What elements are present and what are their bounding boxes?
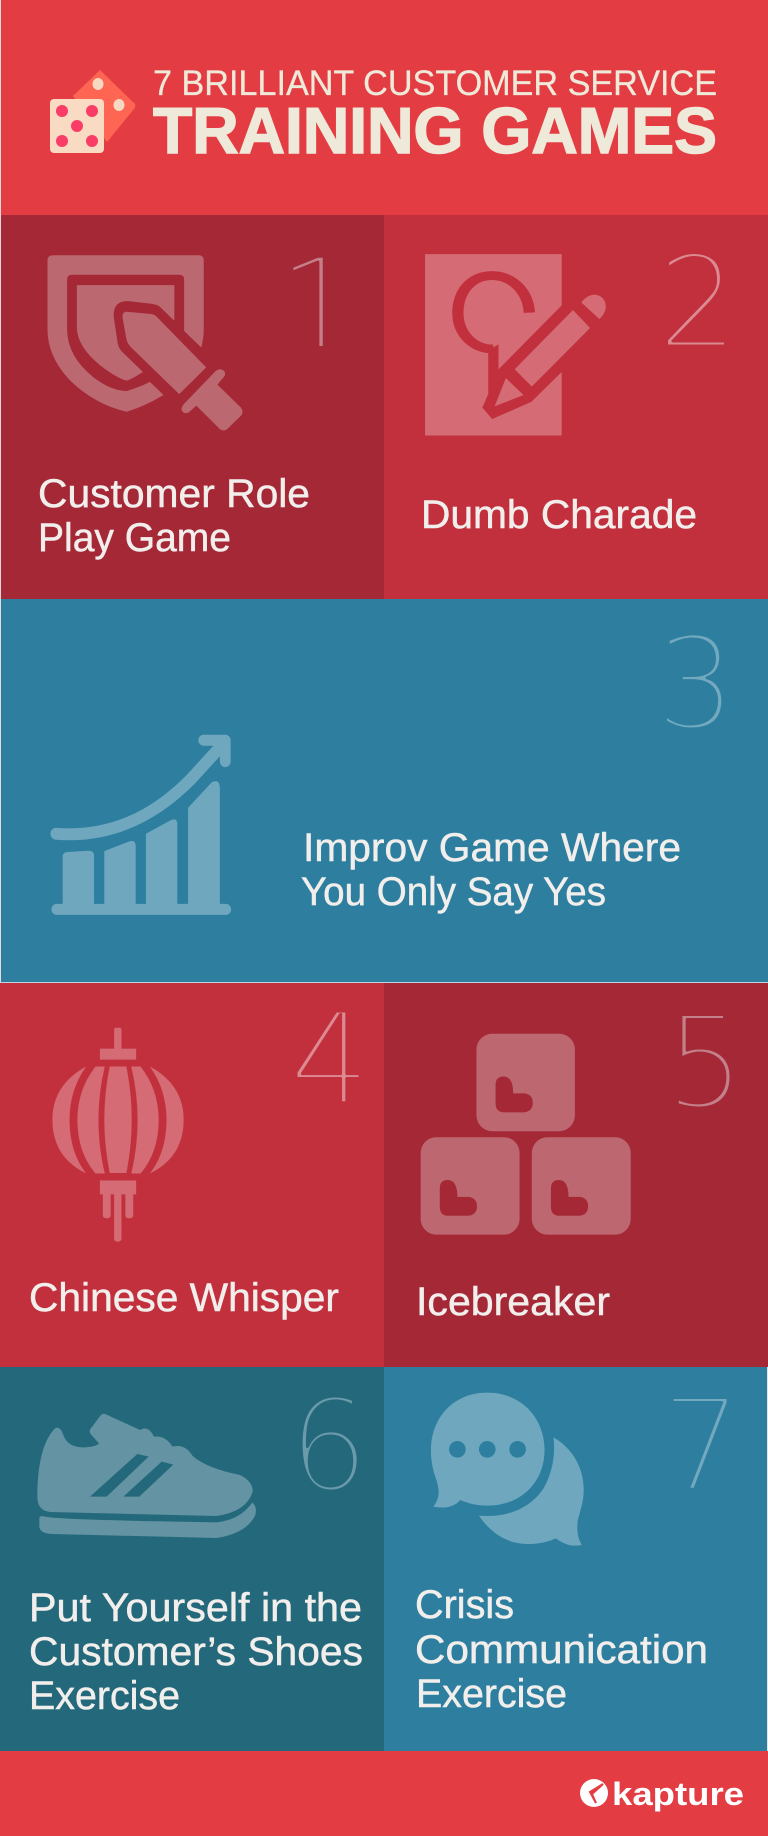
panel 6: Put Yourself in the Customer's Shoes [0,1367,384,1751]
label: Customer Role Play Game: Customer Role [38,472,310,516]
header panel [0,0,768,215]
label: Improv Game Where You Only Say Yes: You Only Say Yes [301,870,606,914]
label: Crisis Communication Exercise: Communication [415,1628,708,1672]
label: Crisis Communication Exercise: Crisis [415,1583,514,1627]
label: Icebreaker: Icebreaker [416,1280,610,1324]
title: 7 BRILLIANT CUSTOMER SERVICE [153,64,717,103]
panel 3: Improv Game [0,599,768,983]
icon: speech card and pencil [425,254,617,436]
panel 5: Icebreaker [384,983,768,1367]
icon: speech bubbles [431,1393,584,1546]
number 3: 3 [656,610,736,757]
icon: dice [50,70,135,153]
logo: kapture: kapture [612,1776,744,1812]
panel 1: Customer Role Play Game [0,215,384,599]
label: Put Yourself in the Customer's Shoes Exercise: Customer’s Shoes [29,1630,363,1674]
icon: running shoe [37,1414,256,1538]
label: Customer Role Play Game: Play Game [38,516,231,560]
title: TRAINING GAMES [153,94,717,167]
panel 7: Crisis Communication Exercise [384,1367,767,1751]
label: Customer Role Play Game [38,472,310,560]
icon: shield and sword [48,255,243,431]
icon: heart blocks [421,1034,631,1235]
icon: rising bar chart [51,740,231,915]
label: Put Yourself in the Customer's Shoes Exercise: Exercise [29,1674,180,1718]
footer [0,1751,768,1836]
panel 2: Dumb Charade [384,215,768,599]
label: Improv Game Where You Only Say Yes [301,826,681,914]
label: Crisis Communication Exercise: Exercise [416,1672,567,1716]
number 2: 2 [658,229,738,376]
icon: chinese lantern [52,1028,184,1242]
label: Dumb Charade: Dumb Charade [421,493,697,537]
number 4: 4 [290,986,370,1133]
number 6: 6 [289,1372,369,1519]
panel 4: Chinese Whisper [0,983,384,1367]
label: Improv Game Where You Only Say Yes: Improv Game Where [303,826,681,870]
number 5: 5 [665,989,745,1136]
label: Chinese Whisper: Chinese Whisper [29,1276,339,1320]
label: Put Yourself in the Customer's Shoes Exercise: Put Yourself in the [29,1586,362,1630]
number 7: 7 [662,1372,742,1519]
number 1: 1 [278,230,360,382]
label: Crisis Communication Exercise [415,1583,708,1716]
label: Put Yourself in the Customer's Shoes Exercise [29,1586,363,1718]
